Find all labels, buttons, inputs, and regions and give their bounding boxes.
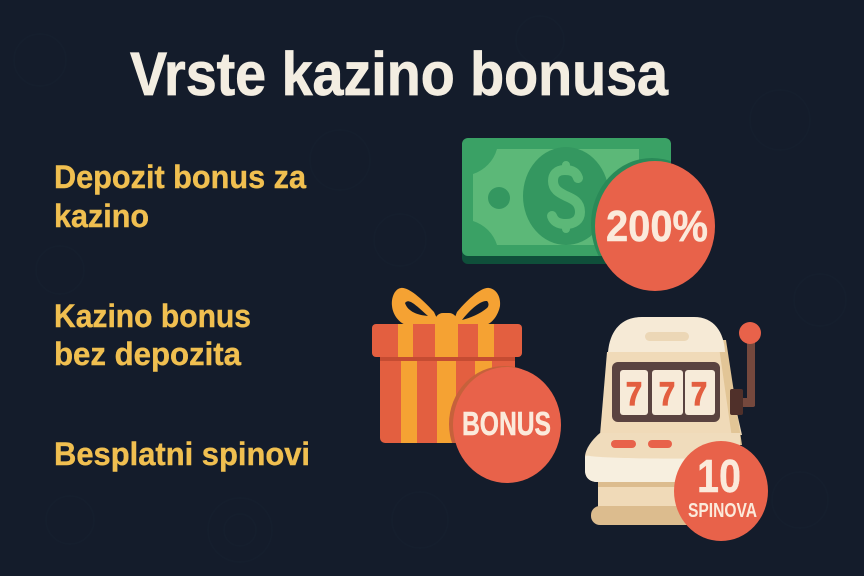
slot reels: 7 xyxy=(691,376,707,412)
icon: banknote with 200% badge xyxy=(462,138,715,291)
slot reels xyxy=(620,370,715,415)
label: no deposit bonus: Kazino bonus xyxy=(54,298,251,334)
badge: bonus: BONUS xyxy=(462,405,551,442)
badge: 10 spinova: SPINOVA xyxy=(688,500,757,522)
label: no deposit bonus: bez depozita xyxy=(54,336,241,372)
badge: 10 spinova xyxy=(674,441,768,541)
slot reels: 7 xyxy=(626,376,642,412)
badge: 200% xyxy=(595,161,715,291)
badge: bonus xyxy=(453,367,561,483)
label: deposit bonus: Depozit bonus za xyxy=(54,159,306,195)
label: deposit bonus xyxy=(54,159,306,234)
label: no deposit bonus xyxy=(54,298,251,372)
gift bow xyxy=(392,288,500,333)
badge: 200%: 200% xyxy=(606,202,708,251)
label: deposit bonus: kazino xyxy=(54,198,149,234)
icon: dollar sign xyxy=(552,165,580,229)
badge: 10 spinova: 10 xyxy=(697,450,741,502)
icon: slot machine with spins badge xyxy=(585,317,768,541)
slot reels: 7 xyxy=(659,376,675,412)
title: Vrste kazino bonusa xyxy=(130,40,669,108)
icon: gift with bonus badge xyxy=(372,288,561,483)
label: free spins: Besplatni spinovi xyxy=(54,436,310,472)
